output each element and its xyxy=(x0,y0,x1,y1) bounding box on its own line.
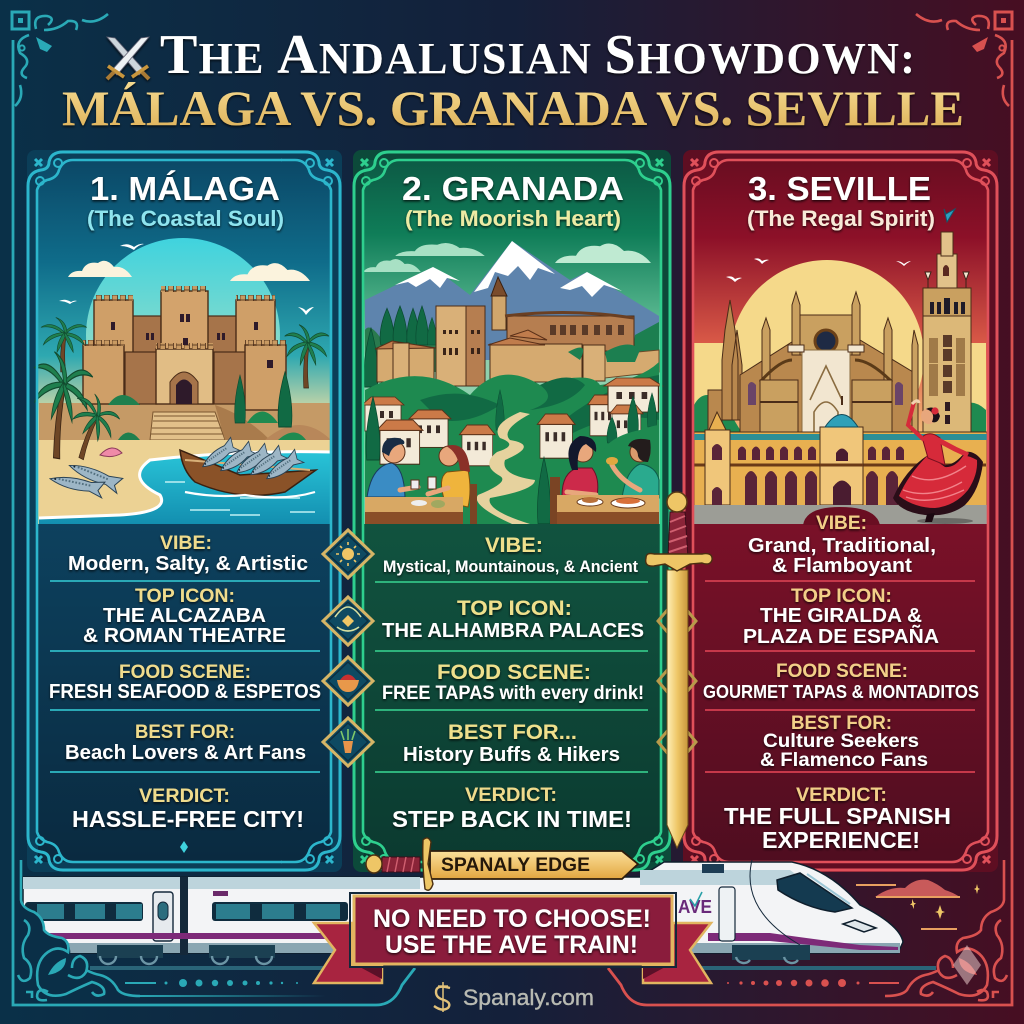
title: THE ANDALUSIAN SHOWDOWN: xyxy=(160,24,916,86)
panel heading: Málaga: (The Coastal Soul) xyxy=(87,206,284,231)
logo: Spanaly.com: Spanaly.com xyxy=(463,985,594,1010)
panel frame xyxy=(28,152,340,870)
stats block: Seville: PLAZA DE ESPAÑA xyxy=(743,625,939,648)
icon: crossed swords xyxy=(107,37,149,79)
panel heading: Málaga: 1. MÁLAGA xyxy=(90,170,280,207)
stats block: Granada: VERDICT: xyxy=(465,785,557,806)
panel: Seville xyxy=(683,150,998,872)
stats block: Málaga: HASSLE-FREE CITY! xyxy=(72,806,304,832)
stats block: Seville: FOOD SCENE: xyxy=(776,661,908,682)
stats block: Málaga: VIBE: xyxy=(160,533,212,554)
stats block: Málaga: & ROMAN THEATRE xyxy=(83,625,286,647)
stats block: Seville: BEST FOR: xyxy=(791,713,892,734)
stats block: Granada: Mystical, Mountainous, & Ancient xyxy=(383,557,638,576)
panel heading: Seville: 3. SEVILLE xyxy=(748,170,931,207)
stats block: Granada xyxy=(364,524,660,862)
stats block: Seville: Grand, Traditional, xyxy=(748,535,936,557)
stats block: Granada: FOOD SCENE: xyxy=(437,661,591,684)
stats block: Seville: EXPERIENCE! xyxy=(762,827,920,853)
illustration: Seville cathedral, Giralda and flamenco dancer xyxy=(694,209,987,524)
stats block: Seville: Culture Seekers xyxy=(763,731,919,752)
icons: left gutter diamonds xyxy=(323,530,373,766)
illustration: Alcazaba castle and beach xyxy=(28,238,331,524)
stats block: Málaga: FOOD SCENE: xyxy=(119,662,251,683)
panel: Málaga xyxy=(27,150,342,872)
flamenco dancer xyxy=(893,401,983,524)
stats block: Málaga: FRESH SEAFOOD & ESPETOS xyxy=(49,681,321,703)
horizontal sword: Spanaly Edge xyxy=(366,838,638,890)
stats block: Seville: & Flamboyant xyxy=(772,555,912,577)
panel heading: Granada: 2. GRANADA xyxy=(402,170,624,207)
panel heading: Granada: (The Moorish Heart) xyxy=(405,206,621,231)
stats block: Málaga: Modern, Salty, & Artistic xyxy=(68,553,308,575)
sunset cloud and sparkles xyxy=(856,880,981,985)
decorative dots row right xyxy=(727,979,899,987)
banner xyxy=(314,893,711,983)
stats block: Seville xyxy=(694,507,987,862)
AVE logo: AVE xyxy=(678,897,712,917)
logo: Spanaly.com xyxy=(434,982,594,1012)
stats block: Málaga: Beach Lovers & Art Fans xyxy=(65,742,306,764)
panel frame xyxy=(684,152,997,870)
panel heading: Málaga xyxy=(87,170,284,231)
panel heading: Seville: (The Regal Spirit) xyxy=(747,206,935,231)
stats block: Málaga xyxy=(38,524,331,862)
stats block: Seville: THE FULL SPANISH xyxy=(724,803,951,829)
stats block: Málaga: BEST FOR: xyxy=(135,722,235,743)
icon: palace xyxy=(323,597,373,645)
panel heading: Seville xyxy=(747,170,935,231)
stats block: Málaga: THE ALCAZABA xyxy=(103,605,266,627)
stats block: Seville: VERDICT: xyxy=(796,785,887,806)
stats block: Seville: THE GIRALDA & xyxy=(760,605,922,627)
stats block: Granada: STEP BACK IN TIME! xyxy=(392,806,632,832)
stats block: Granada: BEST FOR... xyxy=(448,721,577,744)
stats block: Granada: History Buffs & Hikers xyxy=(403,744,620,766)
stats block: Granada: TOP ICON: xyxy=(457,597,572,620)
icon: food bowl xyxy=(323,657,373,705)
stats block: Málaga: VERDICT: xyxy=(139,786,230,807)
vertical gold sword xyxy=(646,492,712,848)
stats block: Seville: VIBE: xyxy=(816,513,867,534)
panel frame xyxy=(354,152,670,870)
decorative dots row left xyxy=(125,979,298,987)
stats block: Granada: THE ALHAMBRA PALACES xyxy=(382,620,644,642)
horizontal sword: Spanaly Edge: SPANALY EDGE xyxy=(441,855,590,876)
stats block: Seville: & Flamenco Fans xyxy=(760,750,928,771)
panel heading: Granada xyxy=(402,170,624,231)
title xyxy=(62,24,964,136)
panel: Granada xyxy=(353,150,671,872)
icon: sun xyxy=(323,530,373,578)
diners left xyxy=(365,438,477,524)
stats block: Málaga: TOP ICON: xyxy=(135,586,235,607)
train xyxy=(23,860,936,970)
banner: NO NEED TO CHOOSE! xyxy=(373,905,651,933)
illustration: Alhambra with diners xyxy=(362,241,663,525)
stats block: Seville: GOURMET TAPAS & MONTADITOS xyxy=(703,682,979,702)
icon: carrot bouquet xyxy=(323,718,373,766)
icons: right gutter half diamonds xyxy=(658,608,696,755)
stats block: Granada: VIBE: xyxy=(485,534,543,557)
diners right xyxy=(550,436,659,524)
banner: USE THE AVE TRAIN! xyxy=(385,931,638,959)
stats block: Seville: TOP ICON: xyxy=(791,586,892,607)
stats block: Granada: FREE TAPAS with every drink! xyxy=(382,683,644,704)
title: MÁLAGA VS. GRANADA VS. SEVILLE xyxy=(62,80,964,136)
frame scrolls over train xyxy=(15,860,1007,1003)
